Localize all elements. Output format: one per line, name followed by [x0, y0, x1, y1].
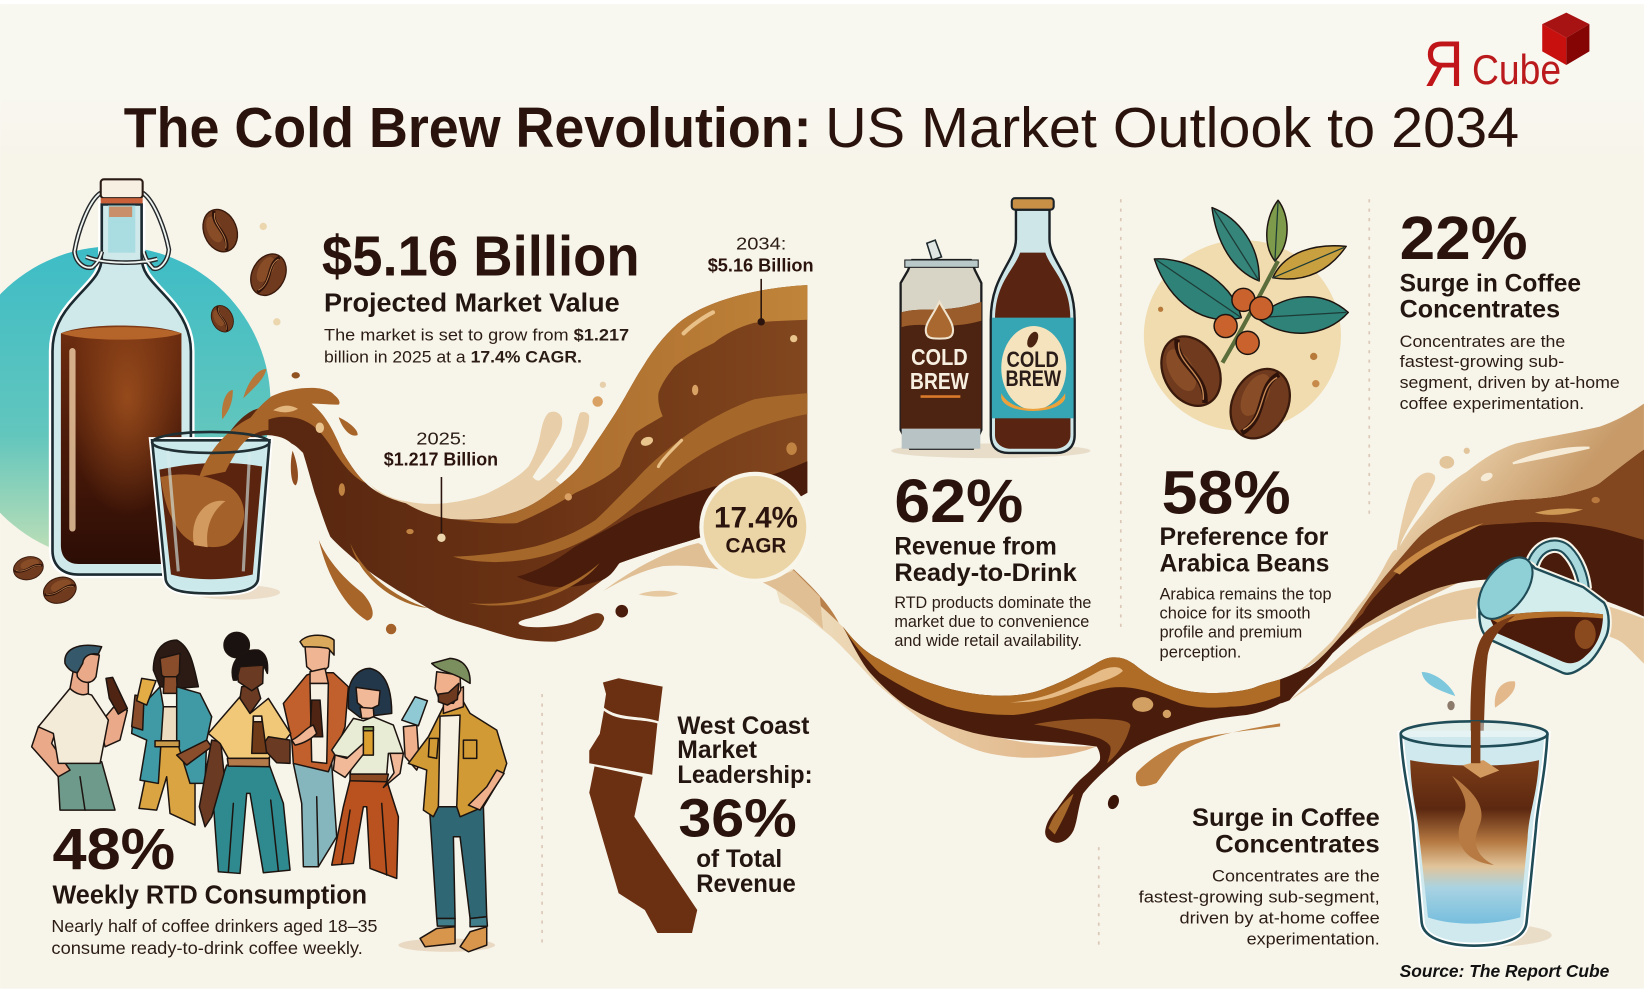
title: US Market Outlook to 2034 — [825, 96, 1519, 159]
text: surge in coffee concentrates — [1139, 804, 1380, 949]
teal circle backdrop — [0, 246, 271, 561]
stat: 62% ready-to-drink: and wide retail availability. — [894, 631, 1082, 650]
stat: 58% arabica — [1160, 459, 1332, 661]
stat: 48% weekly RTD consumption: consume ready-to-drink coffee weekly. — [51, 938, 363, 958]
icon: tall iced coffee glass — [1401, 721, 1552, 947]
stat: 48% weekly RTD consumption: Nearly half of coffee drinkers aged 18–35 — [51, 916, 378, 936]
logo: RCube: Я — [1424, 27, 1464, 100]
text: surge in coffee concentrates: Concentrates — [1215, 830, 1380, 858]
icon: cold brew swing-top bottle — [52, 179, 191, 575]
stat: projected market value: billion in 2025 at a 17.4% CAGR. — [324, 348, 582, 367]
second coffee stream — [771, 404, 1644, 843]
stat: 22% concentrates — [1400, 204, 1620, 413]
chart label: 2034 value: $5.16 Billion — [708, 255, 814, 276]
stat: 62% ready-to-drink: RTD products dominate the — [894, 593, 1091, 612]
stat: 22% concentrates: Surge in Coffee — [1400, 269, 1581, 297]
chart label: 2034 value: 2034: — [736, 234, 786, 254]
chart label: 2025 value — [384, 429, 498, 542]
text: surge in coffee concentrates: driven by at-home coffee — [1179, 909, 1380, 928]
icon: pitcher pouring coffee — [1422, 545, 1609, 760]
illustration: group of six young coffee drinkers — [32, 632, 507, 952]
stat: 58% arabica: profile and premium — [1160, 622, 1302, 641]
stat: projected market value: Projected Market Value — [324, 287, 620, 317]
badge: 17.4% CAGR: 17.4% — [714, 501, 798, 534]
person 1: man in cream tee — [32, 645, 127, 810]
stat: 62% ready-to-drink: Revenue from — [894, 533, 1057, 561]
stat: 22% concentrates: Concentrates are the — [1400, 332, 1565, 351]
stat: 62% ready-to-drink: Ready-to-Drink — [894, 559, 1078, 587]
icon: cold brew can and bottle — [891, 198, 1090, 458]
person 6: bearded man in mustard overshirt — [398, 658, 507, 952]
stat: 58% arabica: Arabica remains the top — [1160, 585, 1332, 604]
person 5: woman with dark bob — [332, 668, 403, 878]
chart label: 2025 value: 2025: — [416, 429, 467, 449]
chart label: 2025 value: $1.217 Billion — [384, 448, 498, 469]
text: surge in coffee concentrates: Concentrates are the — [1212, 867, 1380, 886]
stat: 22% concentrates: 22% — [1400, 204, 1528, 272]
stat: West Coast 36%: of Total — [696, 845, 782, 873]
stat: West Coast 36%: Revenue — [696, 870, 796, 898]
person 2: woman in teal shirt — [132, 640, 212, 825]
stat: West Coast 36%: Market — [677, 736, 758, 764]
stat: 62% ready-to-drink: market due to convenience — [894, 612, 1089, 631]
stat: 62% ready-to-drink: 62% — [894, 467, 1023, 535]
stat: projected market value: $5.16 Billion — [322, 225, 640, 288]
person 3: woman with bun and yellow blouse — [199, 632, 291, 873]
text: surge in coffee concentrates: experimentation. — [1247, 930, 1380, 949]
logo: RCube — [1424, 13, 1589, 100]
icon: cold brew can and bottle: BREW — [1005, 366, 1061, 391]
stat: 48% weekly RTD consumption — [51, 817, 378, 958]
stat: 58% arabica: perception. — [1160, 642, 1241, 661]
stat: West Coast 36%: 36% — [678, 790, 797, 849]
icon: West Coast map — [589, 678, 697, 933]
icon: coffee branch and beans — [1144, 200, 1348, 449]
stat: 58% arabica: choice for its smooth — [1160, 604, 1311, 623]
stat: 48% weekly RTD consumption: 48% — [52, 817, 175, 882]
stat: 22% concentrates: segment, driven by at-home — [1400, 373, 1620, 392]
chart label: 2034 value — [708, 234, 814, 326]
stat: 48% weekly RTD consumption: Weekly RTD Consumption — [52, 880, 367, 910]
stat: 22% concentrates: coffee experimentation. — [1400, 394, 1584, 413]
stat: 58% arabica: 58% — [1162, 459, 1291, 527]
stat: 22% concentrates: fastest-growing sub- — [1400, 352, 1564, 371]
logo: RCube: Cube — [1472, 46, 1561, 93]
source note: Source: The Report Cube — [1400, 961, 1609, 981]
stat: West Coast 36% — [677, 712, 813, 898]
title — [124, 96, 1519, 159]
first coffee stream rising to 2034 — [215, 285, 823, 642]
icon: iced coffee glass — [152, 411, 280, 600]
stat: 58% arabica: Arabica Beans — [1160, 549, 1329, 577]
title: The Cold Brew Revolution: — [124, 96, 812, 159]
person 4: blond man in rust jacket — [283, 635, 348, 867]
badge: 17.4% CAGR — [699, 472, 810, 583]
icon: coffee beans around bottle — [11, 204, 293, 608]
stat: 62% ready-to-drink — [894, 467, 1091, 650]
stat: projected market value: The market is set to grow from $1.217 — [324, 326, 629, 345]
stat: projected market value — [322, 225, 640, 367]
stat: 22% concentrates: Concentrates — [1400, 296, 1560, 324]
icon: cold brew can and bottle: COLD — [911, 344, 968, 370]
badge: 17.4% CAGR: CAGR — [726, 534, 786, 557]
text: surge in coffee concentrates: Surge in Coffee — [1192, 804, 1380, 832]
stat: 58% arabica: Preference for — [1160, 523, 1329, 551]
icon: cold brew can and bottle: BREW — [910, 368, 969, 394]
text: surge in coffee concentrates: fastest-growing sub-segment, — [1139, 888, 1380, 907]
stat: West Coast 36%: West Coast — [677, 712, 810, 740]
icon: cold brew can and bottle: COLD — [1007, 347, 1059, 372]
stat: West Coast 36%: Leadership: — [677, 761, 813, 789]
